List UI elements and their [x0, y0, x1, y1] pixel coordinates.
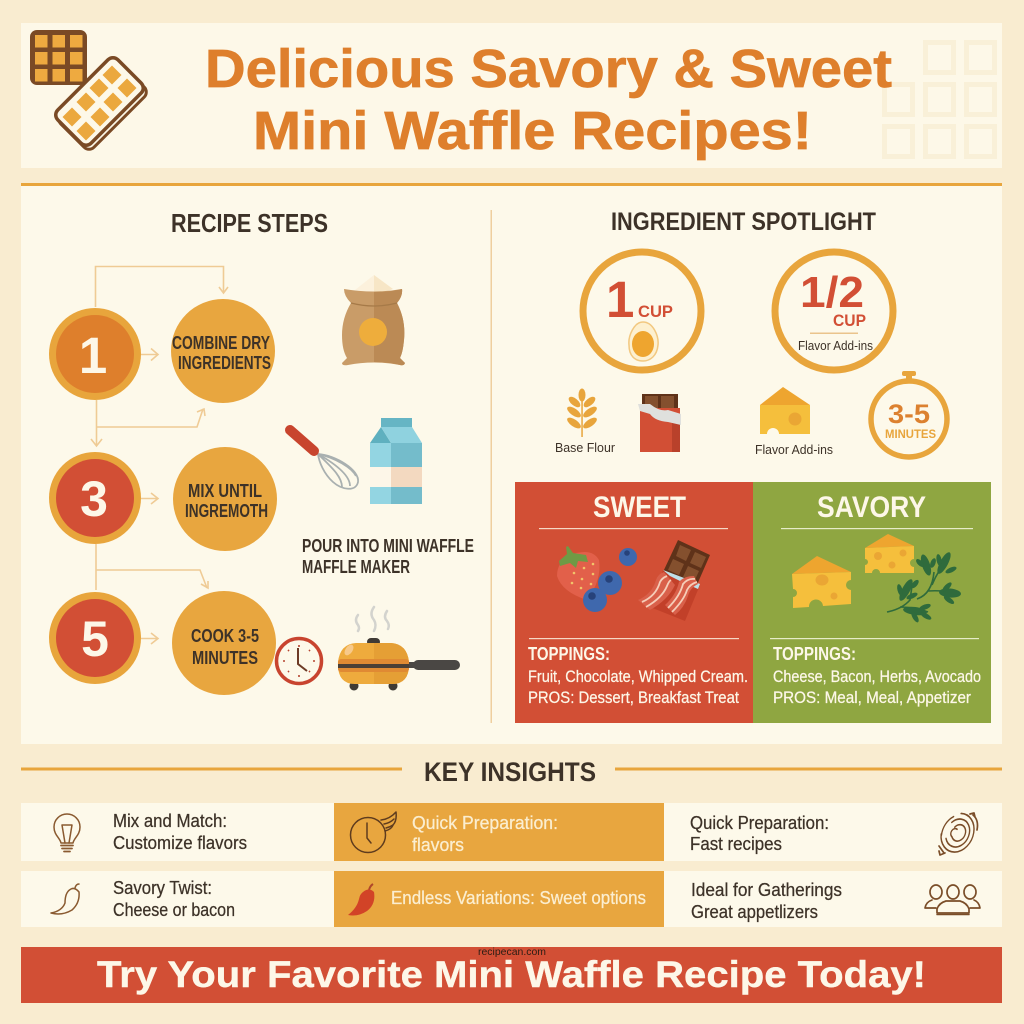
text — [113, 878, 235, 920]
text: sweet toppings and pros: PROS: Dessert, Breakfast Treat — [528, 688, 739, 707]
stat: 1/2 cup: Flavor Add-ins — [798, 339, 873, 353]
stat: 1 cup — [583, 252, 701, 370]
panel: main content — [21, 186, 1002, 744]
decorative waffle grid — [884, 42, 994, 156]
text: Quick Preparation: — [412, 813, 558, 833]
icon: chili outline — [51, 884, 79, 914]
title — [205, 39, 892, 161]
heading: recipe steps: RECIPE STEPS — [171, 208, 328, 238]
insight: endless variations (highlight) — [334, 871, 664, 927]
icon: herbs — [887, 551, 961, 623]
label: base flour: Base Flour — [555, 440, 616, 455]
icon: winged clock — [350, 812, 396, 852]
header panel — [21, 23, 1002, 168]
stat: 1 cup: 1 — [606, 271, 634, 328]
title: Mini Waffle Recipes! — [253, 101, 812, 161]
call to action banner: Try Your Favorite Mini Waffle Recipe Today! — [97, 954, 926, 995]
icon: spiral — [936, 808, 980, 857]
text: Ideal for Gatherings — [691, 880, 842, 900]
text: Savory Twist: — [113, 878, 212, 898]
stat: 1/2 cup — [775, 252, 893, 370]
step 1 badge: 1 — [79, 327, 107, 384]
stat: 1/2 cup: 1/2 — [800, 268, 864, 317]
step: combine dry ingredients — [171, 299, 275, 403]
text — [690, 813, 829, 854]
heading: key insights: KEY INSIGHTS — [424, 757, 596, 787]
insight: quick preparation — [664, 803, 1002, 861]
text: sweet toppings and pros: TOPPINGS: — [528, 644, 610, 664]
stat: stopwatch 3-5 minutes: MINUTES — [885, 427, 936, 441]
step 3 badge: 3 — [80, 471, 108, 527]
text — [412, 813, 558, 855]
icon: milk carton — [370, 418, 422, 504]
icon: waffle maker — [338, 607, 460, 690]
panel: ingredient spotlight — [515, 208, 991, 723]
source credit: recipecan.com — [478, 947, 546, 958]
icon: chocolate and bacon — [638, 540, 710, 621]
stat: 1 cup: CUP — [638, 302, 673, 321]
flow arrows — [91, 266, 228, 644]
icon: flour sack — [342, 275, 405, 365]
text: Quick Preparation: — [690, 813, 829, 833]
icon: egg — [629, 322, 658, 361]
text: flavors — [412, 835, 464, 855]
text: savory toppings and pros — [773, 644, 981, 707]
text: savory toppings and pros: Cheese, Bacon, Herbs, Avocado — [773, 667, 981, 686]
icon: blueberries — [583, 548, 637, 612]
text — [691, 880, 842, 922]
icon: whisk — [290, 430, 358, 489]
step: mix until ingremoth: MIX UNTIL — [188, 481, 262, 501]
call to action banner — [21, 947, 1002, 1003]
insight: ideal for gatherings — [664, 871, 1002, 927]
step: mix until ingremoth — [173, 447, 277, 551]
title: Delicious Savory & Sweet — [205, 39, 892, 99]
step: mix until ingremoth: INGREMOTH — [185, 501, 268, 521]
step: cook 3-5 minutes: COOK 3-5 — [191, 626, 259, 646]
step 5 badge: 5 — [81, 611, 109, 667]
step 1 badge — [49, 308, 141, 400]
insight: savory twist — [21, 871, 334, 927]
text: Fast recipes — [690, 834, 782, 854]
stat: 1/2 cup: CUP — [833, 311, 866, 330]
heading: savory: SAVORY — [817, 491, 926, 524]
panel: recipe steps — [49, 208, 474, 695]
icon: strawberry — [557, 546, 600, 600]
icon: chocolate bar — [638, 394, 681, 452]
text — [113, 811, 247, 853]
section: key insights — [21, 757, 1002, 927]
icon: people — [925, 885, 980, 914]
step: pour into waffle maker — [302, 536, 474, 577]
icon: cheese wedges — [792, 534, 914, 608]
text: savory toppings and pros: PROS: Meal, Meal, Appetizer — [773, 688, 971, 707]
icon: light bulb — [54, 814, 80, 852]
text: Mix and Match: — [113, 811, 227, 831]
stat: stopwatch 3-5 minutes — [871, 371, 947, 457]
heading: ingredient spotlight: INGREDIENT SPOTLIGHT — [611, 208, 876, 236]
text: Great appetlizers — [691, 902, 818, 922]
panel: savory — [753, 482, 991, 723]
text: sweet toppings and pros — [528, 644, 748, 707]
step: pour into waffle maker: MAFFLE MAKER — [302, 557, 410, 577]
text: sweet toppings and pros: Fruit, Chocolate, Whipped Cream. — [528, 667, 748, 686]
text: savory toppings and pros: TOPPINGS: — [773, 644, 856, 664]
icon: tilted waffle — [53, 55, 149, 152]
step: combine dry ingredients: COMBINE DRY — [172, 333, 270, 353]
step 3 badge — [49, 452, 141, 544]
step 5 badge — [49, 592, 141, 684]
step: combine dry ingredients: INGREDIENTS — [178, 353, 271, 373]
icon: clock — [276, 638, 322, 684]
panel: sweet — [515, 482, 753, 723]
icon: wheat — [565, 388, 599, 437]
step: cook 3-5 minutes — [172, 591, 276, 695]
icon: small square waffle — [30, 30, 87, 85]
insight: mix and match — [21, 803, 334, 861]
icon: red chili — [348, 884, 374, 916]
text: Cheese or bacon — [113, 900, 235, 920]
step: cook 3-5 minutes: MINUTES — [192, 648, 258, 668]
text: Endless Variations: Sweet options — [391, 888, 646, 908]
text: Customize flavors — [113, 833, 247, 853]
stat: stopwatch 3-5 minutes: 3-5 — [888, 399, 930, 429]
label: flavor add-ins: Flavor Add-ins — [755, 442, 833, 457]
heading: sweet: SWEET — [593, 491, 686, 524]
icon: cheese wedge — [760, 387, 810, 434]
step: pour into waffle maker: POUR INTO MINI WAFFLE — [302, 536, 474, 556]
insight: quick preparation (highlight) — [334, 803, 664, 861]
